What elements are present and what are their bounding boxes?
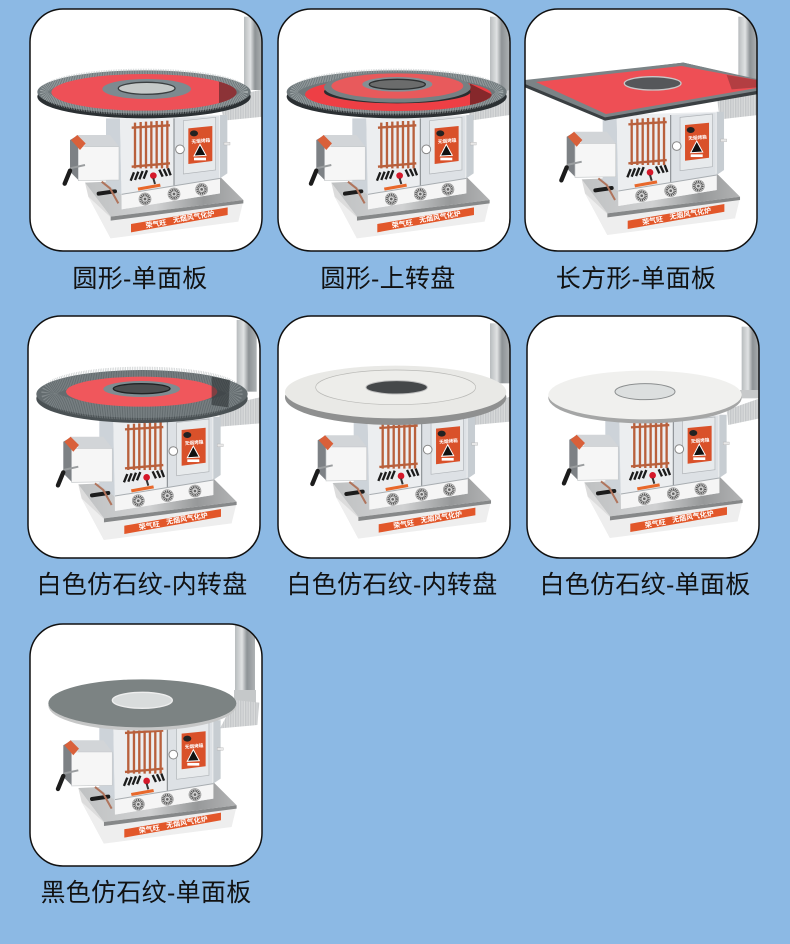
stove body: 无烟风气化炉 xyxy=(671,509,714,524)
stove body: 荣气旺 xyxy=(138,519,160,532)
label: 白色仿石纹-内转盘 xyxy=(286,571,498,599)
stove body: 无烟烤箱 xyxy=(185,438,204,447)
chimney and flue xyxy=(467,17,510,121)
chimney and flue xyxy=(220,17,263,121)
panel: 圆形-单面板 xyxy=(30,9,263,293)
panel: 白色仿石纹-内转盘 (white top) xyxy=(278,316,510,599)
card background xyxy=(278,9,510,251)
round table top xyxy=(37,70,251,118)
stove body: 荣气旺 xyxy=(391,218,413,230)
stove body xyxy=(564,415,743,538)
chimney and flue xyxy=(220,625,259,728)
card border xyxy=(278,9,510,251)
card border xyxy=(30,9,262,251)
panel: 白色仿石纹-单面板 xyxy=(527,316,760,599)
stove body: 荣气旺 xyxy=(642,214,664,227)
stove body: 无烟烤箱 xyxy=(691,436,710,445)
card background xyxy=(30,624,262,866)
product image: rectangular stove xyxy=(525,17,758,235)
panel: 黑色仿石纹-单面板 xyxy=(30,624,262,907)
label: 白色仿石纹-内转盘 xyxy=(36,571,248,599)
stove body: 无烟风气化炉 xyxy=(172,209,215,225)
stove body: 无烟烤箱 xyxy=(185,742,204,751)
stove body: 荣气旺 xyxy=(145,218,167,230)
chimney and flue xyxy=(717,17,758,119)
card border xyxy=(527,316,759,558)
stove body xyxy=(58,720,237,844)
product image: stove with inner turntable xyxy=(36,320,260,540)
card background xyxy=(525,9,757,251)
product image: white stone top with turntable xyxy=(285,323,510,539)
card background xyxy=(30,9,262,251)
panel: 白色仿石纹-内转盘 (dark top) xyxy=(28,316,260,599)
stove body xyxy=(311,115,490,238)
card border xyxy=(525,9,757,251)
product image: black stone single panel xyxy=(48,625,259,844)
panel: 圆形-上转盘 xyxy=(278,9,510,293)
product image: white stone single panel xyxy=(548,327,760,538)
chimney and flue xyxy=(218,320,260,427)
chimney and flue xyxy=(727,327,760,425)
stove body: 荣气旺 xyxy=(393,518,415,530)
card border xyxy=(278,316,510,558)
stove body xyxy=(312,415,491,539)
chimney and flue xyxy=(475,323,510,425)
stove body: 无烟烤箱 xyxy=(438,137,457,145)
white table top xyxy=(548,371,742,423)
stove body xyxy=(65,115,243,238)
stove body: 无烟风气化炉 xyxy=(165,814,208,830)
card border xyxy=(30,624,262,866)
stove body xyxy=(561,112,740,235)
label: 圆形-单面板 xyxy=(72,265,208,293)
panel: 长方形-单面板 xyxy=(525,9,758,293)
stove body: 荣气旺 xyxy=(138,823,160,835)
white stone table top xyxy=(285,366,506,425)
stove body xyxy=(58,417,237,540)
card background xyxy=(527,316,759,558)
label: 黑色仿石纹-单面板 xyxy=(40,879,252,907)
product image: round stove with upper turntable xyxy=(287,17,510,238)
stove body: 无烟风气化炉 xyxy=(165,511,208,526)
product image: round single panel stove xyxy=(37,17,263,238)
stove body: 无烟风气化炉 xyxy=(418,209,461,225)
label: 长方形-单面板 xyxy=(556,265,716,293)
card background xyxy=(28,316,260,558)
label: 圆形-上转盘 xyxy=(320,265,456,293)
stove body: 无烟烤箱 xyxy=(439,437,458,446)
card background xyxy=(278,316,510,558)
grey table top xyxy=(48,679,236,731)
stove body: 无烟风气化炉 xyxy=(420,509,463,525)
label: 白色仿石纹-单面板 xyxy=(539,571,751,599)
stove body: 无烟烤箱 xyxy=(688,133,707,142)
dark table top with inner red disc xyxy=(36,370,248,423)
card border xyxy=(28,316,260,558)
stove body: 荣气旺 xyxy=(644,517,666,530)
table top with turntable xyxy=(287,70,507,118)
rectangular table top xyxy=(525,63,758,121)
stove body: 无烟烤箱 xyxy=(191,137,211,145)
stove body: 无烟风气化炉 xyxy=(669,206,712,221)
